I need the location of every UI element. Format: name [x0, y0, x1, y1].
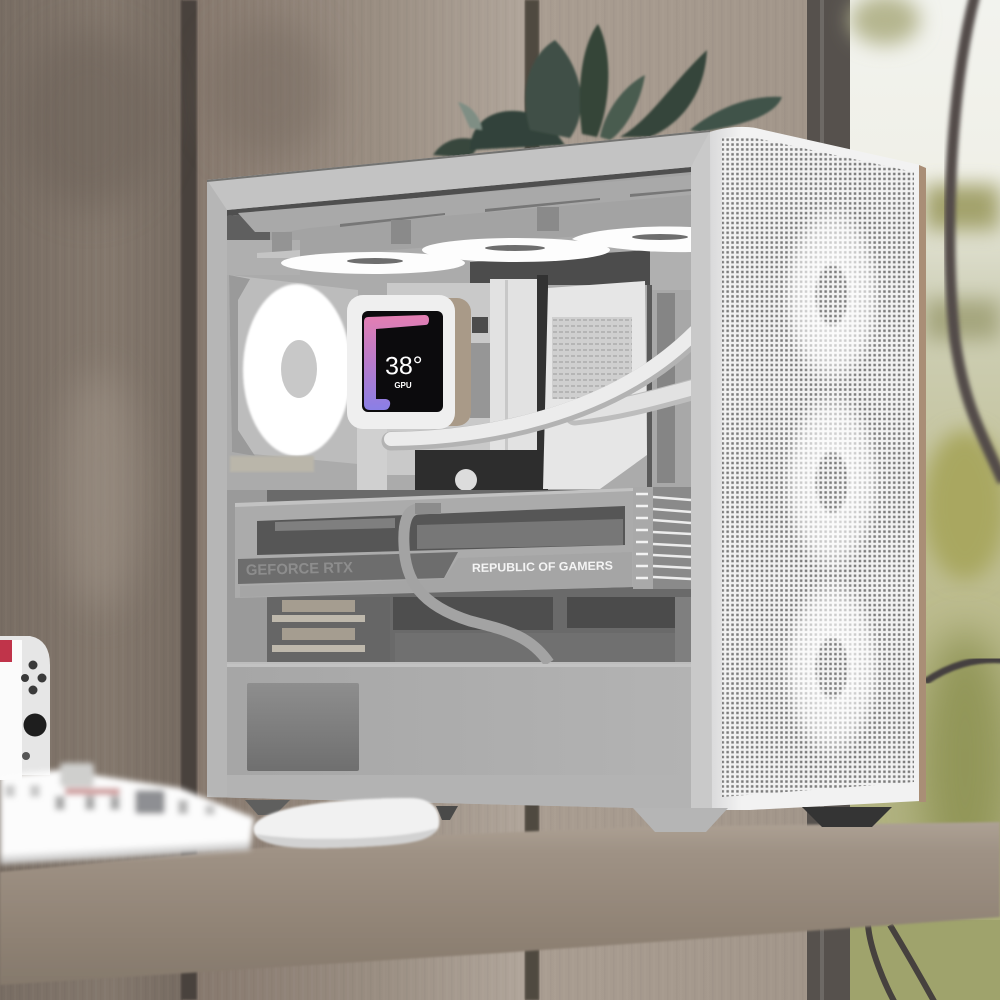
lower chassis area: [227, 490, 691, 662]
rear fan: [229, 275, 358, 472]
AIO pump block with LCD: [347, 295, 471, 429]
bottom intake fan: [782, 576, 882, 760]
top intake fan: [782, 203, 882, 387]
LCD temperature: 38°: [385, 352, 423, 380]
pc case: [207, 127, 926, 832]
desk surface: [0, 822, 1000, 985]
keyboard: [0, 763, 254, 864]
wall below the desk: [850, 920, 1000, 1000]
brand text: REPUBLIC OF GAMERS: [472, 559, 613, 575]
background: window with blurred garden: [850, 0, 1000, 1000]
interior top shadow strip: [227, 167, 691, 216]
glass frame edges: [207, 130, 712, 810]
LCD label: GPU: [394, 381, 412, 390]
top radiator fans: [227, 175, 691, 290]
wood side strip: [919, 165, 926, 802]
PSU shroud: [227, 664, 691, 777]
GPU power cable: [404, 503, 549, 663]
graphics card: [235, 487, 691, 598]
case feet: [245, 800, 892, 832]
case outer frame: [207, 130, 712, 810]
game controller: [0, 636, 50, 780]
AIO tubes: [391, 332, 695, 441]
motherboard area: [227, 228, 691, 490]
mesh front panel: [710, 127, 926, 810]
motherboard cover, radiator and pump base: [357, 275, 691, 495]
computer mouse: [254, 798, 439, 848]
case interior back: [227, 167, 691, 662]
middle intake fan: [782, 390, 882, 574]
pink and purple LCD bracket: [364, 315, 429, 410]
GPU model text: GEFORCE RTX: [246, 559, 353, 579]
plant behind case: [433, 24, 782, 158]
